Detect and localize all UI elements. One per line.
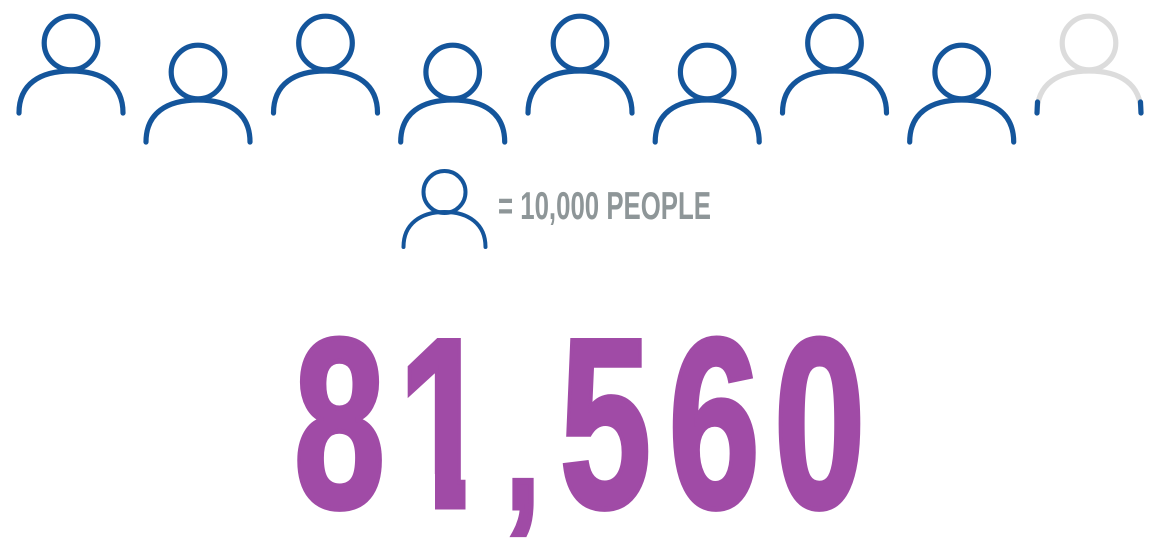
icon: person 5	[528, 16, 632, 113]
pictogram row: nine person icons	[19, 16, 1141, 142]
big number: 560	[560, 288, 865, 554]
icon: person 2	[146, 45, 250, 142]
foot of the numeral 1 masked to match the plain stem	[400, 474, 506, 518]
icon: person 7	[782, 16, 886, 113]
icon: person 3	[274, 16, 378, 113]
icon: person 8	[910, 45, 1014, 142]
big number	[294, 288, 865, 554]
legend text: = 10,000 PEOPLE	[498, 185, 711, 228]
icon: person 9, mostly grey with blue tips	[1037, 16, 1141, 113]
icon: legend person	[404, 171, 486, 247]
icon: person 6	[655, 45, 759, 142]
big number: ,	[507, 353, 539, 544]
big number: 81	[294, 288, 490, 554]
icon: person 1	[19, 16, 123, 113]
icon: person 4	[401, 45, 505, 142]
legend: one icon equals 10,000 people	[404, 171, 711, 247]
